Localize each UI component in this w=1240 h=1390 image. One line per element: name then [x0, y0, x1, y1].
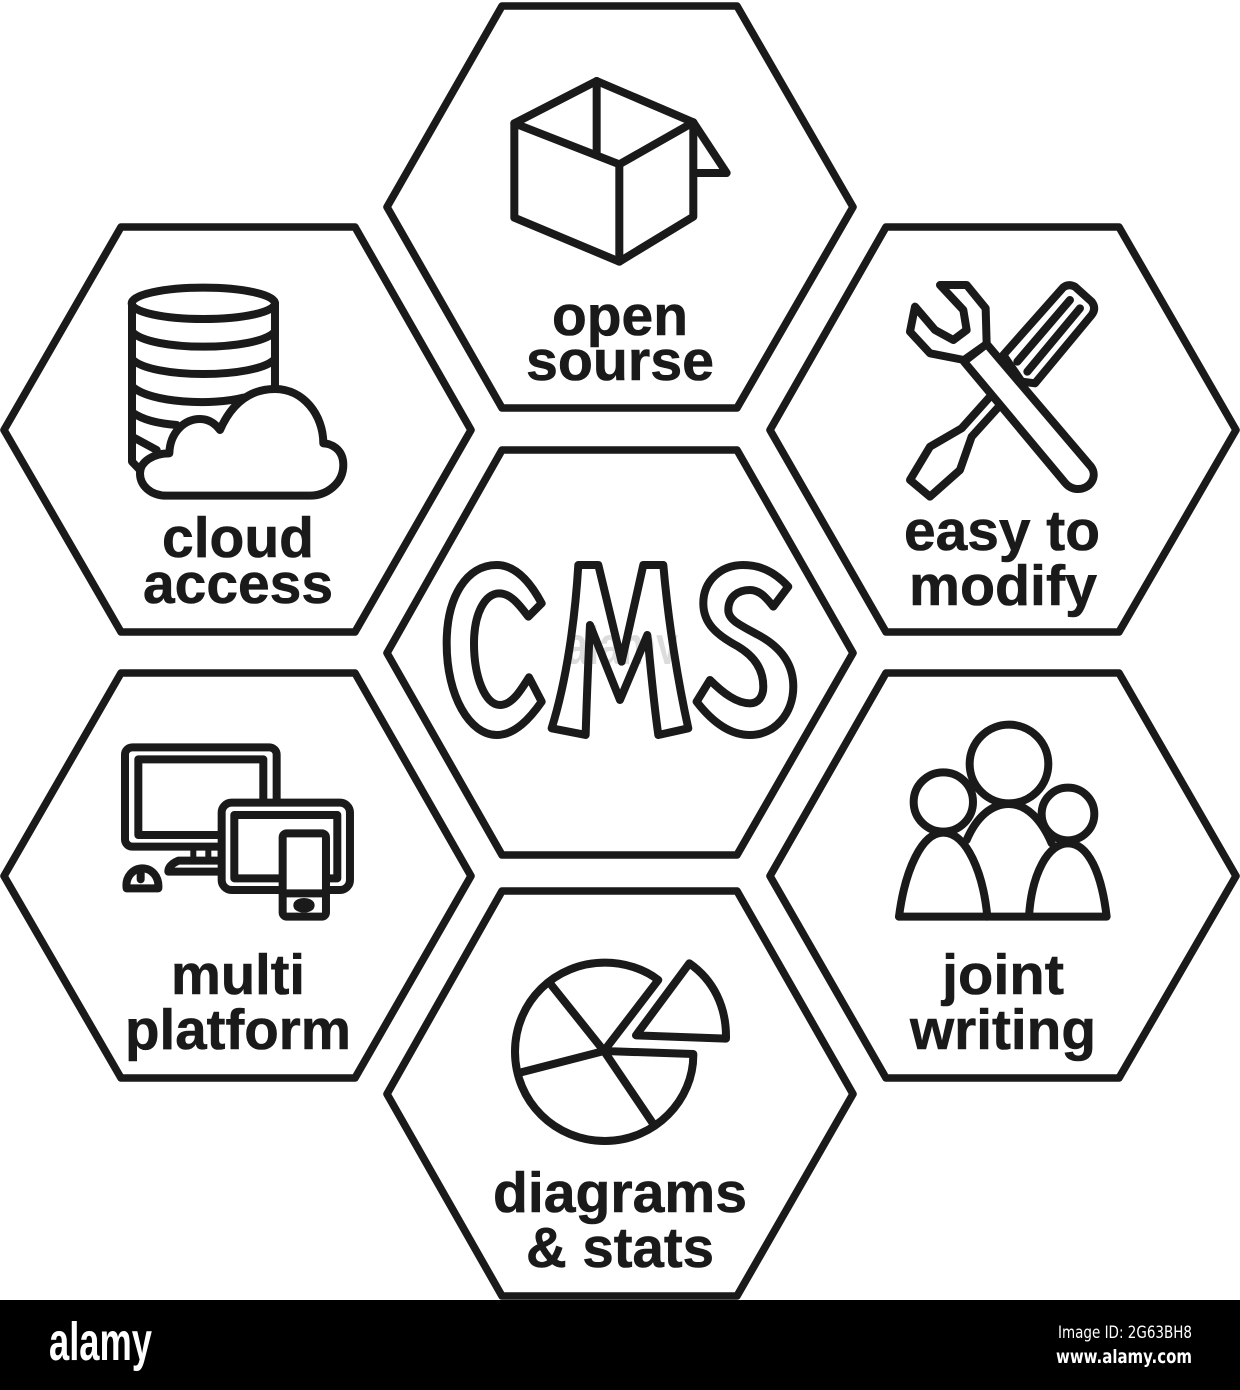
- label: cloud access: access: [143, 552, 333, 616]
- letter C: [447, 565, 542, 735]
- label: open sourse: [526, 284, 714, 393]
- label: joint writing: [909, 943, 1096, 1062]
- logo text: alamy: alamy: [49, 1312, 152, 1372]
- panel: diagrams and stats: [387, 891, 853, 1296]
- label: easy to modify: easy to: [904, 499, 1100, 563]
- label: multi platform: multi: [171, 943, 305, 1007]
- panel: CMS centre: [387, 450, 853, 855]
- label: diagrams & stats: diagrams: [493, 1161, 747, 1225]
- label: open sourse: open: [552, 284, 688, 348]
- icon: desktop, tablet and phone: [125, 747, 350, 917]
- panel: cloud access: [4, 227, 471, 632]
- watermark: alamy behind the M: alamy: [566, 616, 678, 676]
- label: easy to modify: modify: [909, 554, 1097, 618]
- label: diagrams & stats: & stats: [526, 1216, 714, 1280]
- panel: joint writing: [770, 673, 1236, 1078]
- letter S: [697, 565, 793, 735]
- panel: open source: [387, 6, 853, 408]
- letter M: [552, 565, 688, 735]
- website: www.alamy.com: [1056, 1346, 1192, 1368]
- label: multi platform: platform: [125, 998, 351, 1062]
- icon: pie chart: [515, 963, 726, 1141]
- label: easy to modify: [904, 499, 1100, 618]
- footer bar: alamy credit: [0, 1300, 1240, 1390]
- label: multi platform: [125, 943, 351, 1062]
- label: joint writing: joint: [941, 943, 1064, 1007]
- label: open sourse: sourse: [526, 329, 714, 393]
- icon: three people: [899, 725, 1107, 917]
- label: joint writing: writing: [909, 998, 1096, 1062]
- label: cloud access: [143, 506, 333, 616]
- image id: Image ID: 2G63BH8: [1058, 1323, 1192, 1343]
- panel: multi platform: [4, 673, 471, 1078]
- label: diagrams & stats: [493, 1161, 747, 1280]
- panel: easy to modify: [770, 227, 1236, 632]
- icon: open box: [514, 81, 727, 262]
- icon: wrench and screwdriver: [910, 285, 1094, 497]
- label: cloud access: cloud: [162, 506, 314, 570]
- title: CMS outline lettering: [447, 565, 793, 735]
- icon: database with cloud: [132, 288, 343, 496]
